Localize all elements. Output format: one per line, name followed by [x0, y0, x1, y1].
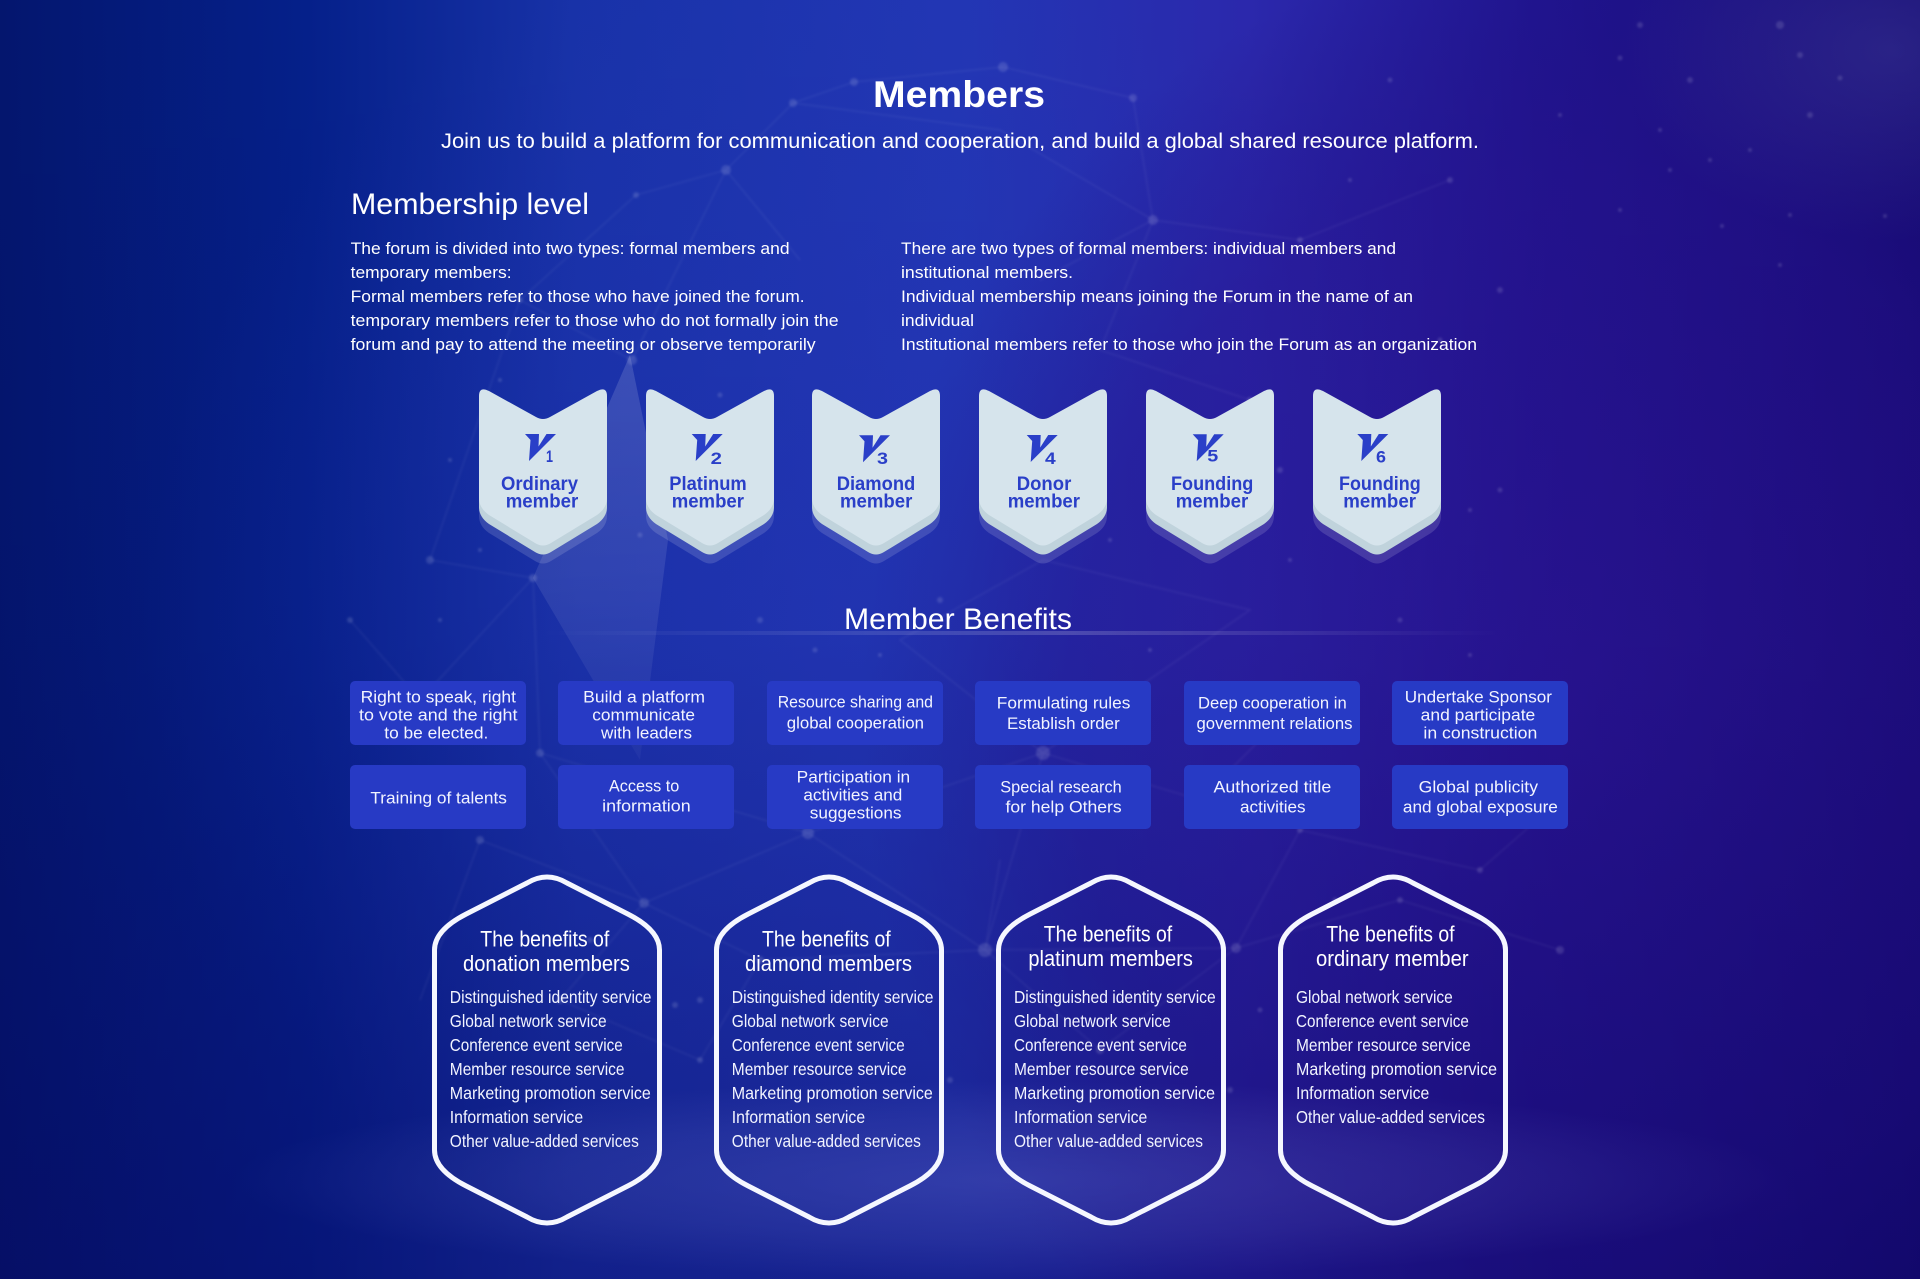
benefit card: resource sharing: Resource sharing and [778, 693, 933, 712]
hexagon panel: diamond members: The benefits of [762, 927, 891, 952]
benefit card: special research: for help Others [1006, 798, 1122, 817]
hexagon panel: ordinary member: Member resource service [1296, 1035, 1471, 1055]
badge: V4 donor member [979, 389, 1107, 564]
badge: V2 platinum member: Platinum [669, 474, 747, 495]
hexagon panel: ordinary member: Conference event service [1296, 1011, 1469, 1031]
badge: V1 ordinary member: Ordinary [501, 474, 578, 495]
badge: V5 founding member: member [1176, 491, 1249, 512]
badge: V2 platinum member: 2 [711, 449, 722, 468]
benefit card: undertake sponsor [1392, 681, 1568, 745]
text block: left description: forum and pay to attend the meeting or observe temporarily [351, 335, 816, 354]
benefit card: authorized title: Authorized title [1214, 777, 1331, 796]
hexagon panel: donation members: Conference event service [450, 1035, 623, 1055]
hexagon panel: platinum members [998, 877, 1224, 1223]
benefit card: right to speak: to vote and the right [359, 706, 518, 725]
benefit card: authorized title: activities [1240, 798, 1306, 817]
text block: left description [351, 239, 839, 354]
benefit card: formulating rules: Establish order [1007, 714, 1120, 733]
benefit card: undertake sponsor: Undertake Sponsor [1405, 688, 1552, 707]
hexagon panel: donation members: Information service [450, 1107, 583, 1127]
benefit card: right to speak: Right to speak, right [361, 688, 516, 707]
benefit card: deep cooperation: government relations [1196, 714, 1352, 733]
badge: V6 founding member: Founding [1339, 474, 1421, 495]
hexagon panel: donation members: Distinguished identity service [450, 987, 652, 1007]
benefit card: build a platform: with leaders [600, 724, 692, 743]
text block: right description: institutional members. [901, 263, 1073, 282]
hexagon panel: diamond members: Distinguished identity service [732, 987, 934, 1007]
hexagon panel: diamond members: Conference event service [732, 1035, 905, 1055]
hexagon panel: ordinary member: ordinary member [1316, 946, 1469, 971]
benefit card: participation: activities and [803, 786, 902, 805]
benefit card: access to information [558, 765, 734, 829]
badge: V5 founding member: 5 [1207, 446, 1218, 465]
badge: V6 founding member: member [1343, 491, 1417, 512]
hexagon panel: platinum members: Marketing promotion service [1014, 1083, 1215, 1103]
hexagon panel: donation members: Global network service [450, 1011, 607, 1031]
text block: right description: Individual membership means joining the Forum in the name of an [901, 287, 1413, 306]
benefit card: build a platform [558, 681, 734, 745]
benefit card: access to information: Access to [609, 777, 679, 796]
badge: V3 diamond member: Diamond [837, 474, 915, 495]
benefit card: access to information: information [602, 797, 691, 816]
benefit card: undertake sponsor: in construction [1423, 724, 1537, 743]
text block: right description: individual [901, 311, 974, 330]
hexagon panel: ordinary member [1280, 877, 1506, 1223]
benefit card: deep cooperation: Deep cooperation in [1198, 694, 1347, 713]
badge: V1 ordinary member [479, 389, 607, 564]
hexagon panel: diamond members: diamond members [745, 951, 912, 976]
hexagon panel: platinum members: The benefits of [1044, 922, 1173, 947]
hexagon panel: donation members: donation members [463, 951, 630, 976]
hexagon panel: ordinary member: Other value-added services [1296, 1107, 1485, 1127]
hexagon panel: donation members: Other value-added services [450, 1131, 639, 1151]
benefit card: right to speak: to be elected. [384, 724, 488, 743]
badge: V3 diamond member: 3 [877, 449, 888, 468]
badge: V6 founding member [1313, 389, 1441, 564]
hexagon panel: diamond members: Member resource service [732, 1059, 906, 1079]
benefit card: deep cooperation [1184, 681, 1360, 745]
benefit card: formulating rules: Formulating rules [997, 694, 1130, 713]
hexagon panel: platinum members: Information service [1014, 1107, 1147, 1127]
hexagon panel: donation members: Marketing promotion service [450, 1083, 651, 1103]
text block: left description: The forum is divided into two types: formal members and [351, 239, 790, 258]
benefit card: participation: Participation in [797, 768, 910, 787]
title: Members [873, 74, 1045, 115]
benefit card: training of talents: Training of talents [370, 788, 507, 807]
text block: left description: temporary members refer to those who do not formally join the [351, 311, 839, 330]
badge: V6 founding member: 6 [1376, 447, 1386, 466]
hexagon panel: platinum members: Other value-added services [1014, 1131, 1203, 1151]
badge: V4 donor member: 4 [1045, 449, 1056, 468]
text block: right description: Institutional members refer to those who join the Forum as an organization [901, 335, 1477, 354]
hexagon panel: ordinary member: Information service [1296, 1083, 1429, 1103]
hexagon panel: diamond members [716, 877, 942, 1223]
benefit card: formulating rules [975, 681, 1151, 745]
badge: V4 donor member: member [1008, 491, 1081, 512]
badge: V1 ordinary member: 1 [546, 447, 553, 466]
hexagon panel: diamond members: Marketing promotion service [732, 1083, 933, 1103]
badge: V4 donor member: Donor [1017, 474, 1072, 495]
benefit card: build a platform: communicate [592, 706, 695, 725]
badge: V5 founding member: Founding [1171, 474, 1253, 495]
benefit card: special research [975, 765, 1151, 829]
hexagon panel: platinum members: Conference event service [1014, 1035, 1187, 1055]
hexagon panel: ordinary member: Global network service [1296, 987, 1453, 1007]
hexagon panel: platinum members: Global network service [1014, 1011, 1171, 1031]
benefit card: special research: Special research [1000, 777, 1122, 796]
benefit card: participation [767, 765, 943, 829]
hexagon panel: donation members [434, 877, 660, 1223]
badge: V3 diamond member: member [840, 491, 913, 512]
hexagon panel: platinum members: platinum members [1028, 946, 1193, 971]
hexagon panel: diamond members: Global network service [732, 1011, 889, 1031]
badge: V2 platinum member: member [672, 491, 745, 512]
text block: right description [901, 239, 1477, 354]
benefit card: build a platform: Build a platform [583, 688, 705, 707]
benefit card: authorized title [1184, 765, 1360, 829]
badge: V5 founding member [1146, 389, 1274, 564]
hexagon panel: ordinary member: The benefits of [1326, 922, 1455, 947]
hexagon panel: ordinary member: Marketing promotion service [1296, 1059, 1497, 1079]
benefit card: global publicity: Global publicity [1419, 777, 1539, 796]
badge: V1 ordinary member: member [506, 491, 579, 512]
text block: right description: There are two types of formal members: individual members and [901, 239, 1396, 258]
benefit card: undertake sponsor: and participate [1421, 706, 1535, 725]
badge: V2 platinum member [646, 389, 774, 564]
hexagon panel: donation members: Member resource service [450, 1059, 624, 1079]
hexagon panel: donation members: The benefits of [480, 927, 610, 952]
benefit card: global publicity [1392, 765, 1568, 829]
text block: left description: Formal members refer to those who have joined the forum. [351, 287, 805, 306]
benefit card: global publicity: and global exposure [1403, 798, 1558, 817]
hexagon panel: platinum members: Distinguished identity service [1014, 987, 1216, 1007]
text block: left description: temporary members: [351, 263, 512, 282]
badge: V3 diamond member [812, 389, 940, 564]
benefit card: training of talents [350, 765, 526, 829]
benefit card: resource sharing [767, 681, 943, 745]
hexagon panel: diamond members: Information service [732, 1107, 865, 1127]
heading: membership level: Membership level [351, 188, 589, 221]
hexagon panel: diamond members: Other value-added services [732, 1131, 921, 1151]
benefit card: right to speak [350, 681, 526, 745]
benefit card: participation: suggestions [810, 804, 902, 823]
hexagon panel: platinum members: Member resource service [1014, 1059, 1189, 1079]
heading: member benefits: Member Benefits [844, 603, 1072, 636]
benefit card: resource sharing: global cooperation [787, 713, 924, 732]
subtitle: Join us to build a platform for communication and cooperation, and build a global shared resource platform. [441, 130, 1479, 153]
